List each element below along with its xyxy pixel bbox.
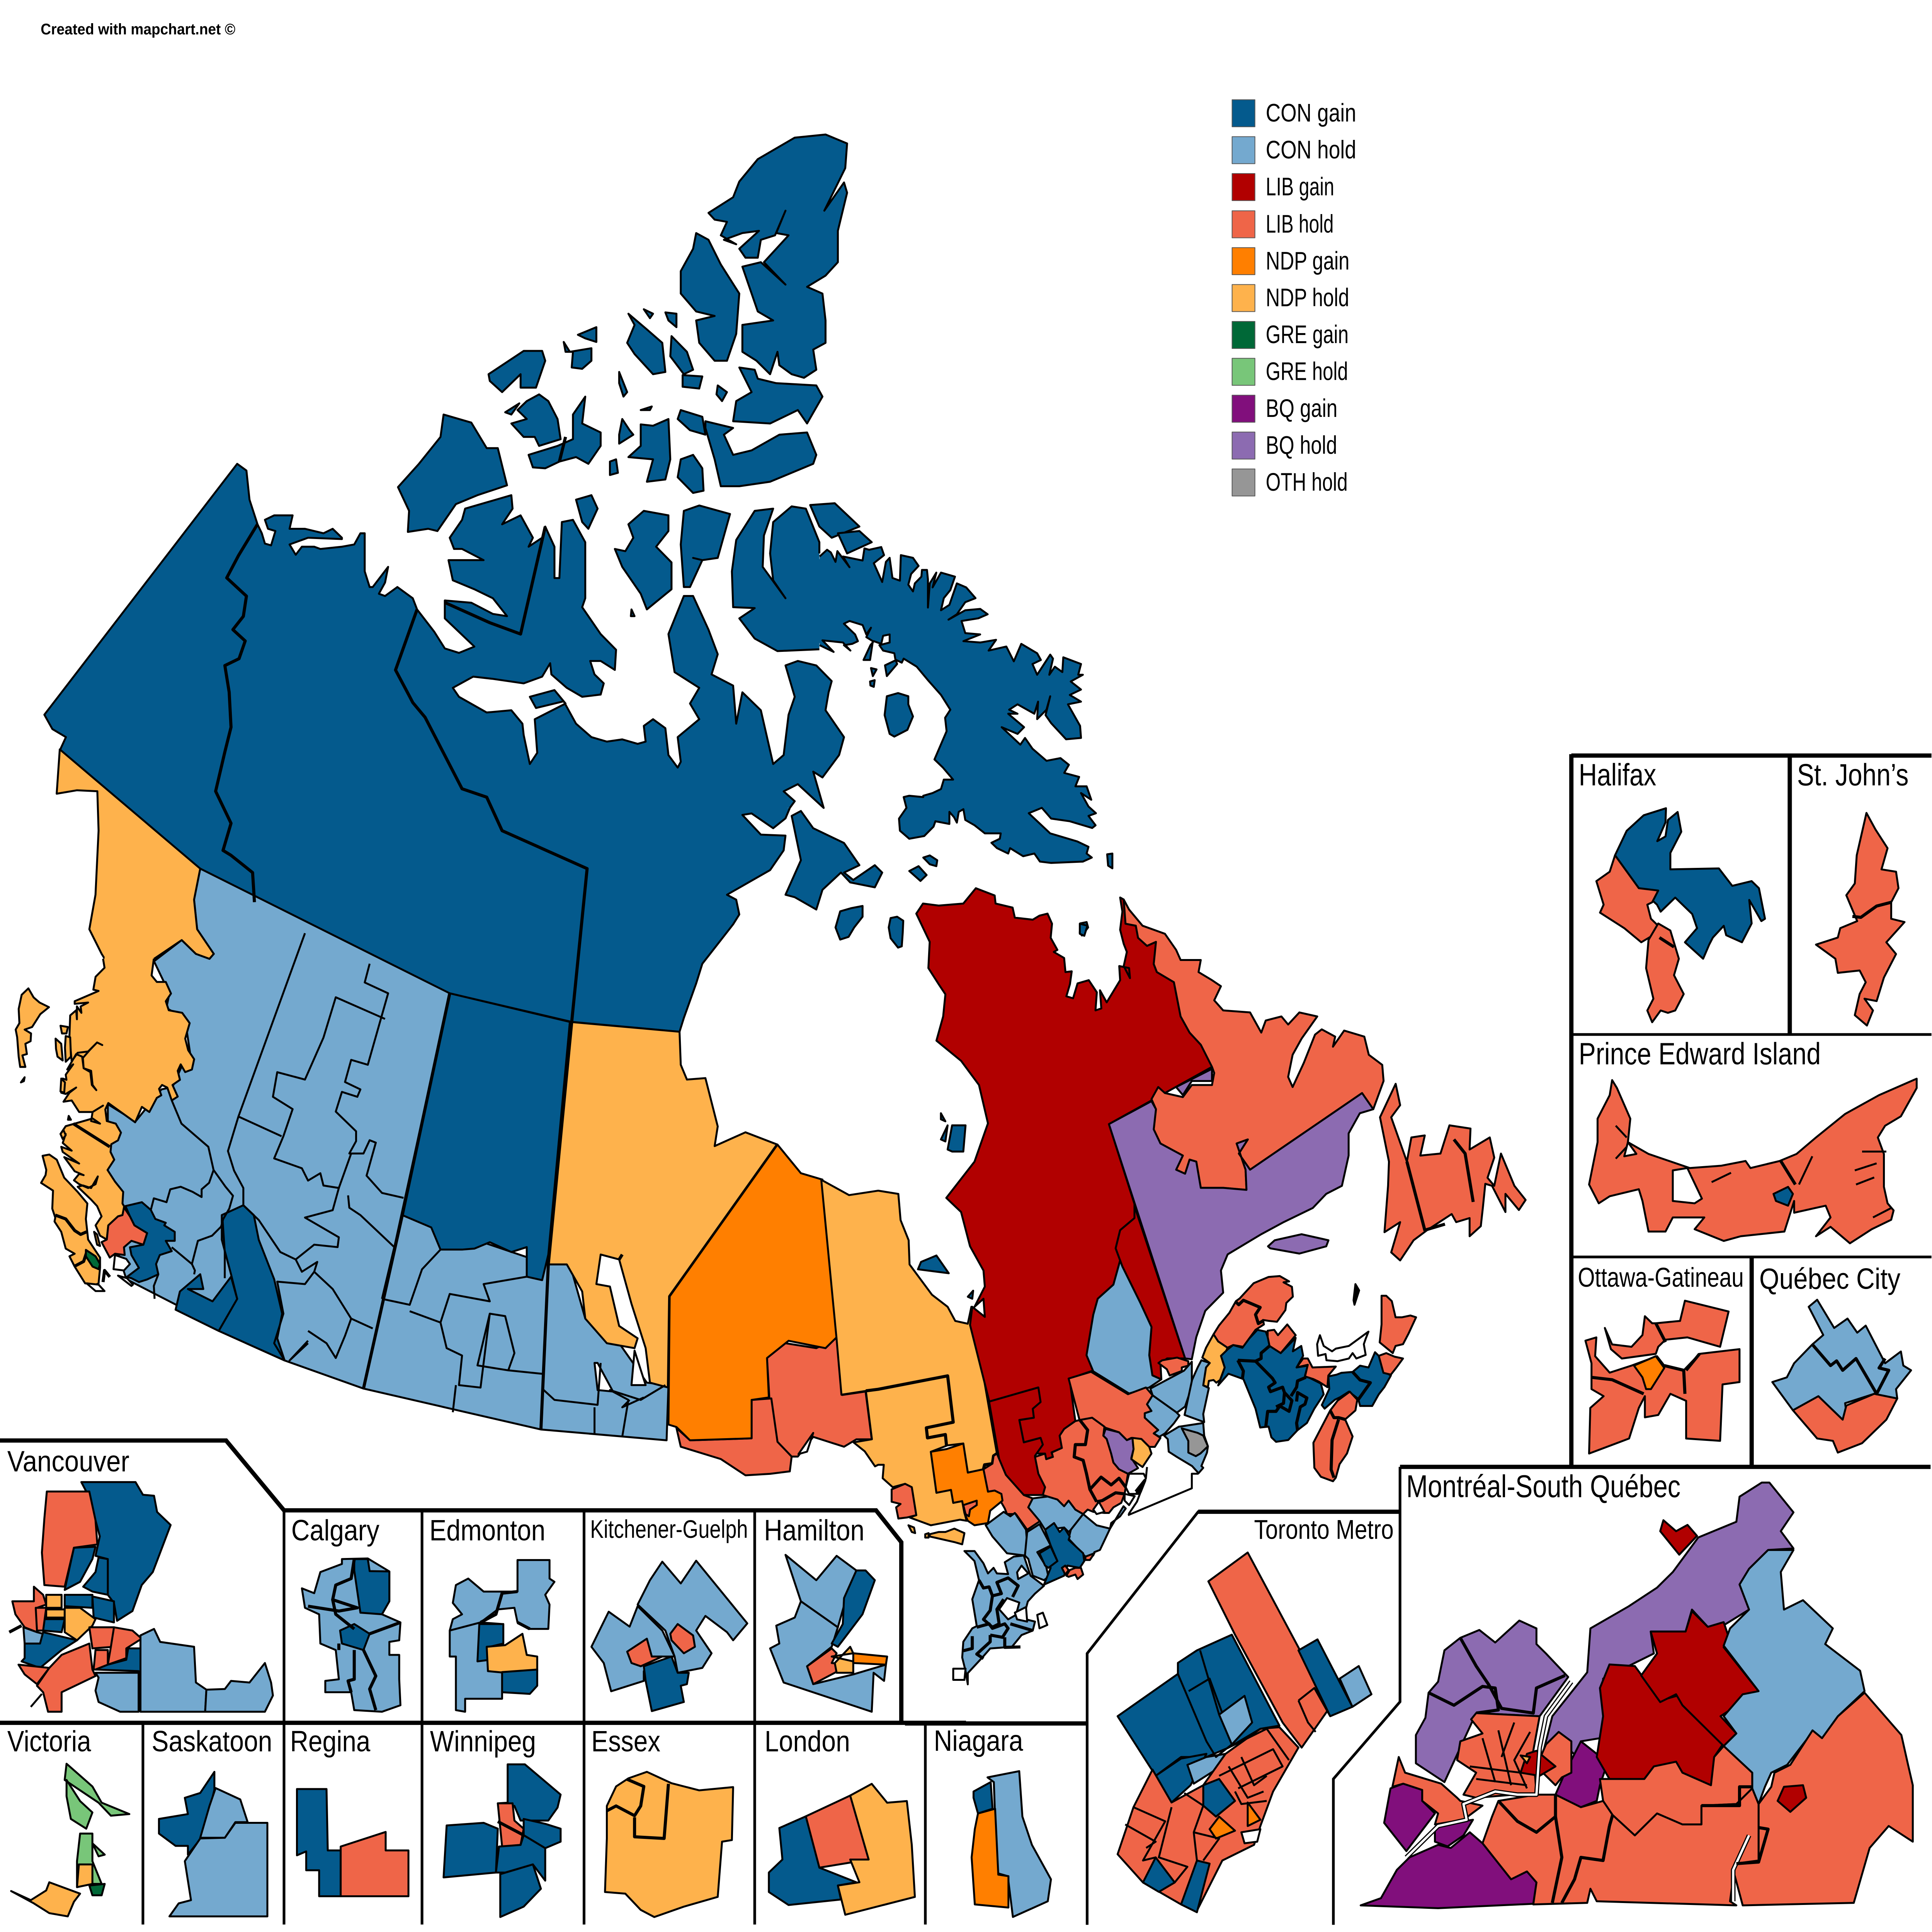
inset: Winnipeg bbox=[444, 1764, 561, 1917]
inset titles: Essex bbox=[591, 1725, 660, 1758]
northern BC NDP hold bbox=[57, 749, 214, 959]
northern Quebec LIB gain bbox=[916, 888, 1212, 1459]
coastal islands bbox=[21, 1026, 100, 1246]
inset: Halifax bbox=[1596, 808, 1765, 1022]
Muskoka and central Ontario CON hold bbox=[986, 1496, 1126, 1580]
northern Ontario NDP hold lower bbox=[854, 1376, 967, 1525]
inset titles bbox=[7, 757, 1908, 1758]
map: Arctic islands and northern territories bbox=[44, 134, 872, 808]
Lower Mainland CON gain bbox=[126, 1202, 175, 1282]
New Brunswick CON gain bbox=[1218, 1330, 1324, 1442]
inset: St. John's bbox=[1816, 813, 1905, 1026]
inset: Vancouver bbox=[9, 1482, 273, 1712]
Pontiac LIB gain bbox=[989, 1388, 1045, 1495]
inset titles: Regina bbox=[290, 1725, 371, 1758]
inset titles: Toronto Metro bbox=[1254, 1514, 1394, 1545]
inset titles: Saskatoon bbox=[151, 1725, 272, 1758]
Chicoutimi LIB hold bbox=[1158, 1357, 1188, 1376]
Bas-Saint-Laurent CON hold bbox=[1185, 1360, 1210, 1422]
map: BC south coast bbox=[16, 959, 233, 1299]
inset titles: Halifax bbox=[1579, 757, 1656, 792]
inset panels: Niagara, Toronto, Montreal bbox=[905, 1467, 1930, 1925]
Nickel Belt NDP gain bbox=[931, 1444, 1003, 1525]
Quebec lower LIB hold bbox=[1069, 1372, 1160, 1447]
inset: Montreal-South Quebec bbox=[1361, 1483, 1913, 1908]
Sudbury LIB hold bbox=[983, 1454, 1041, 1530]
Southampton Island bbox=[786, 811, 882, 910]
legend bbox=[1232, 99, 1356, 496]
inset titles: St. John’s bbox=[1797, 757, 1908, 792]
northeast Ontario NDP hold bbox=[821, 1180, 997, 1473]
legend: CON hold bbox=[1266, 135, 1356, 164]
inset panels: Atlantic and Quebec bbox=[1571, 754, 1932, 1466]
Nord-du-Quebec BQ hold bbox=[1109, 1093, 1373, 1359]
Lac-Saint-Jean CON hold bbox=[1087, 1260, 1162, 1393]
Haida Gwaii bbox=[16, 988, 49, 1067]
Prince Edward Island marker bbox=[1317, 1332, 1369, 1361]
Belcher and small bay islands bbox=[941, 924, 1087, 1299]
inset: Kitchener-Guelph bbox=[592, 1561, 747, 1711]
Nova Scotia CON gain bbox=[1322, 1352, 1391, 1409]
legend: NDP hold bbox=[1266, 283, 1349, 312]
connector to Montreal inset bbox=[1128, 1474, 1199, 1515]
Sunshine Coast LIB hold bbox=[102, 1208, 147, 1258]
inset: Regina bbox=[297, 1789, 408, 1896]
Quebec NDP hold bbox=[1131, 1438, 1151, 1467]
legend: LIB hold bbox=[1266, 209, 1334, 238]
inset: Ottawa-Gatineau bbox=[1585, 1301, 1740, 1454]
credit text: Created with mapchart.net © bbox=[41, 20, 235, 38]
inset titles: Ottawa-Gatineau bbox=[1578, 1262, 1744, 1293]
Sault LIB hold bbox=[892, 1484, 916, 1519]
Newfoundland bbox=[1380, 1084, 1526, 1260]
Labrador LIB hold bbox=[1124, 900, 1384, 1190]
inset: London bbox=[769, 1784, 915, 1915]
map: eastern Baffin Island bbox=[820, 547, 1112, 947]
inset titles: Hamilton bbox=[764, 1514, 864, 1547]
Toronto area LIB bbox=[1062, 1553, 1094, 1579]
map: western and central provinces bbox=[57, 437, 949, 1475]
Southwestern Ontario borders and white city cut-outs bbox=[953, 1566, 1047, 1680]
Cape Breton LIB hold bbox=[1380, 1296, 1416, 1353]
Saskatchewan north CON gain bbox=[402, 993, 570, 1280]
legend: BQ gain bbox=[1266, 394, 1337, 422]
inset: Prince Edward Island bbox=[1589, 1079, 1917, 1243]
inset titles: Niagara bbox=[934, 1724, 1024, 1757]
lakes bbox=[595, 1350, 646, 1391]
inset: Edmonton bbox=[450, 1560, 554, 1712]
inset titles: Vancouver bbox=[7, 1445, 129, 1478]
islands bbox=[398, 134, 872, 616]
Magdalen Islands bbox=[1354, 1284, 1359, 1305]
Nova Scotia LIB hold bbox=[1313, 1392, 1357, 1481]
Manitoba NDP hold bbox=[548, 1022, 777, 1388]
New Brunswick borders bbox=[1238, 1346, 1307, 1430]
Michipicoten bbox=[798, 1433, 813, 1454]
inset: Saskatoon bbox=[159, 1772, 267, 1917]
Akimiski island bbox=[918, 1255, 949, 1273]
Chibougamau LIB gain strip bbox=[1116, 1206, 1185, 1379]
inset titles: Winnipeg bbox=[430, 1725, 536, 1758]
Lanaudiere BQ hold bbox=[1103, 1429, 1138, 1474]
Alberta and Saskatchewan riding borders bbox=[216, 437, 837, 1437]
Montreal and Gatineau white marker bbox=[1093, 1474, 1146, 1514]
inset titles: Prince Edward Island bbox=[1579, 1036, 1821, 1071]
legend: GRE hold bbox=[1266, 357, 1348, 386]
inset titles: Kitchener-Guelph bbox=[590, 1515, 748, 1543]
inset titles: Québec City bbox=[1759, 1262, 1900, 1295]
inset: Hamilton bbox=[770, 1555, 887, 1712]
Anticosti bbox=[1268, 1234, 1328, 1253]
Prairie and Alberta CON hold base bbox=[108, 869, 450, 1389]
map: southern Ontario and western Quebec bbox=[854, 1362, 1199, 1684]
legend: CON gain bbox=[1266, 99, 1356, 127]
legend: NDP gain bbox=[1266, 247, 1349, 275]
inset titles: London bbox=[765, 1725, 850, 1758]
Nanaimo GRE gain bbox=[86, 1250, 100, 1269]
legend: OTH hold bbox=[1266, 468, 1348, 496]
GTA-East CON gain bbox=[1044, 1523, 1084, 1585]
inset titles: Victoria bbox=[7, 1725, 91, 1758]
Saguenay and Charlevoix CON hold bbox=[1145, 1362, 1192, 1437]
Rimouski NDP hold bbox=[1202, 1334, 1228, 1387]
Manitoba CON hold bbox=[364, 1215, 668, 1440]
legend: GRE gain bbox=[1266, 320, 1349, 349]
inset: Niagara bbox=[972, 1771, 1051, 1917]
interior BC CON gain bbox=[219, 1205, 285, 1361]
legend: LIB gain bbox=[1266, 172, 1334, 201]
inset: Victoria bbox=[11, 1764, 129, 1917]
inset panels: western and Ontario bbox=[0, 1440, 966, 1925]
inset titles: Montréal-South Québec bbox=[1406, 1469, 1680, 1504]
inset: Toronto Metro bbox=[1117, 1553, 1371, 1912]
frame lines bbox=[1571, 754, 1932, 1466]
Vancouver Island bbox=[41, 1155, 100, 1285]
Foxe Basin and Hudson Strait islands bbox=[835, 668, 1112, 947]
legend: BQ hold bbox=[1266, 431, 1337, 459]
Manitoulin NDP hold bbox=[908, 1525, 964, 1544]
inset frame lines bbox=[0, 1440, 966, 1925]
frame lines bbox=[905, 1467, 1930, 1925]
map: Quebec east and Maritimes bbox=[1158, 1276, 1416, 1481]
west Baffin Island bbox=[732, 507, 820, 651]
inset: Essex bbox=[605, 1772, 733, 1917]
inset: Calgary bbox=[302, 1558, 400, 1712]
inset titles: Edmonton bbox=[429, 1514, 545, 1547]
New Brunswick LIB hold bbox=[1268, 1325, 1296, 1353]
BC interior riding borders bbox=[73, 1100, 233, 1299]
northwest Ontario LIB hold bbox=[767, 1338, 872, 1457]
Gaspé LIB hold bbox=[1214, 1276, 1293, 1348]
map: northeast Ontario and Quebec bbox=[821, 888, 1526, 1473]
Southwestern Ontario CON hold bbox=[962, 1551, 1044, 1684]
inset: Quebec City bbox=[1772, 1300, 1911, 1452]
inset titles: Calgary bbox=[291, 1514, 379, 1547]
Kenora NDP gain bbox=[668, 1145, 837, 1440]
Vancouver white inset marker bbox=[87, 1255, 133, 1291]
Beauce OTH hold bbox=[1182, 1429, 1208, 1456]
